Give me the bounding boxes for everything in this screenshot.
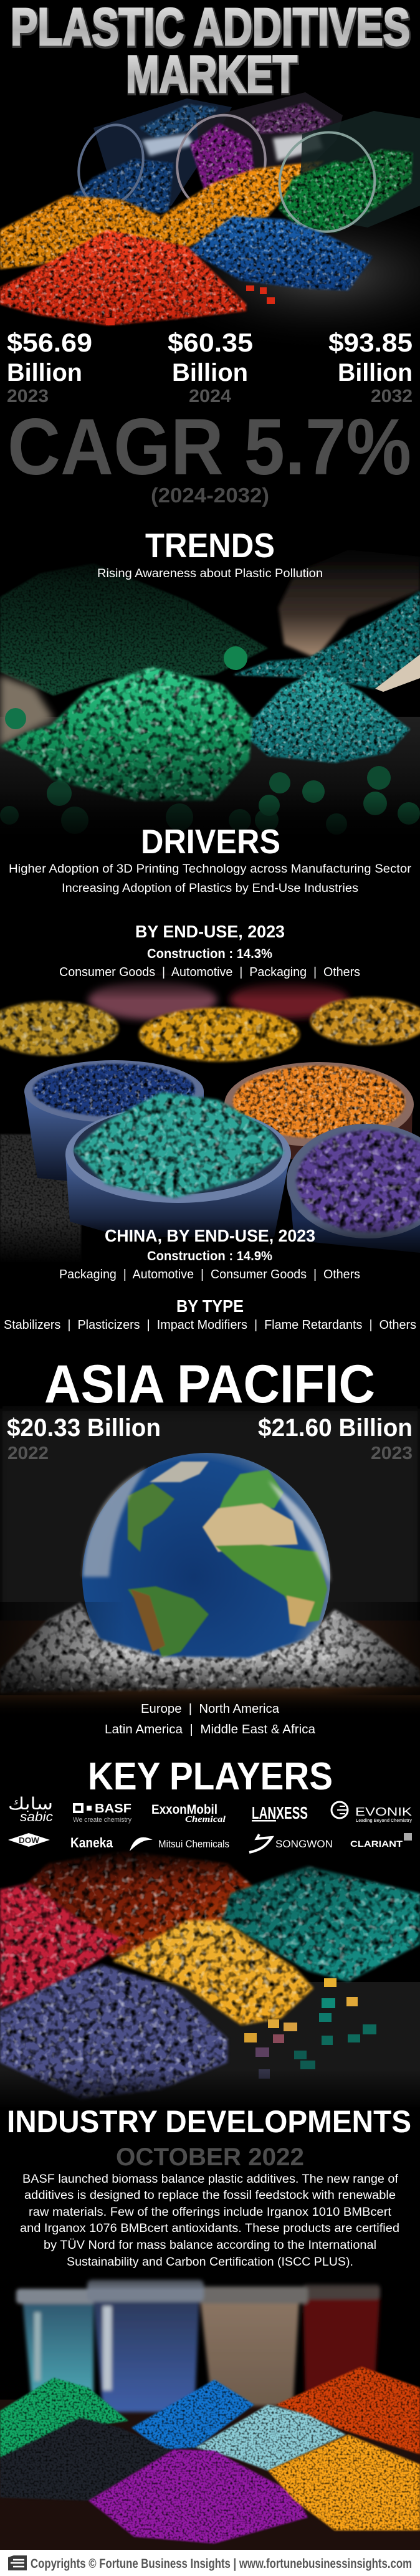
development date: OCTOBER 2022 (116, 2143, 304, 2171)
segment: by end-use 2023: Construction : 14.3% (147, 947, 272, 961)
segment: china by end-use 2023: Packaging | Automotive | Consumer Goods | Others (59, 1268, 360, 1281)
regional value: 2023: $21.60 Billion (258, 1414, 413, 1442)
segment: by type: Stabilizers | Plasticizers | Impact Modifiers | Flame Retardants | Others (4, 1318, 416, 1332)
pile: light blue (196, 2405, 346, 2471)
logo: songwon: SONGWON (275, 1838, 333, 1850)
stat: 2023 market size: $56.69 (7, 328, 92, 357)
stat: 2023 market size: 2023 (7, 386, 49, 406)
logo: clariant: CLARIANT (350, 1839, 403, 1849)
logos: key players (8, 1794, 412, 1852)
title (11, 0, 410, 103)
logo: sabic: sabic (20, 1810, 54, 1824)
regional value: 2023 (258, 1414, 413, 1463)
logo: mitsui chemicals: Mitsui Chemicals (158, 1838, 229, 1850)
jar: green (267, 111, 420, 244)
pile: red-orange (276, 2367, 420, 2454)
development description: additives is designed to replace the fossil feedstock with renewable (24, 2189, 396, 2202)
pile: orange (0, 161, 324, 269)
scattered pellets (244, 1978, 376, 2079)
other regions (105, 1702, 316, 1736)
segment: china by end-use 2023 (59, 1226, 360, 1281)
development description: raw materials. Few of the offerings include Irganox 1010 BMBcert (29, 2206, 392, 2219)
stat: 2024 market size: $60.35 (168, 328, 253, 357)
segment: china by end-use 2023: CHINA, BY END-USE, 2023 (105, 1226, 315, 1245)
heading: drivers: DRIVERS (141, 822, 280, 861)
trends image: green and teal pellets (0, 527, 420, 848)
bowls image (0, 975, 420, 1263)
heading: trends: TRENDS (145, 526, 275, 565)
jar: blue (65, 98, 232, 215)
development description: BASF launched biomass balance plastic additives. The new range of (22, 2173, 399, 2186)
globe (81, 1453, 333, 1660)
bowl: teal (65, 1092, 291, 1237)
development description: by TÜV Nord for mass balance according to the International (44, 2239, 376, 2252)
heading: industry developments: INDUSTRY DEVELOPMENTS (7, 2104, 411, 2139)
footer (0, 2550, 420, 2576)
regional value: 2022: 2022 (7, 1444, 49, 1463)
CAGR figure: (2024-2032) (151, 484, 269, 507)
hero image: jars and spilled pellets (0, 92, 420, 352)
regional value: 2022: $20.33 Billion (7, 1414, 161, 1442)
bowl: orange (224, 1062, 414, 1159)
logo: kaneka: Kaneka (70, 1835, 113, 1851)
green beads (0, 646, 420, 835)
stat: 2032 market size: $93.85 (328, 328, 413, 357)
logo: songwon (249, 1834, 333, 1852)
stat: 2032 market size: Billion (338, 359, 413, 386)
jar: purple (165, 92, 343, 223)
pile: black (0, 2418, 171, 2501)
logo: dow (8, 1833, 50, 1847)
pile: blue (131, 2380, 254, 2449)
heading: asia pacific: ASIA PACIFIC (44, 1354, 375, 1414)
logo: lanxess: LANXESS (252, 1803, 308, 1822)
bowl: purple and blue (287, 1124, 420, 1253)
stat: 2032 market size: 2032 (371, 386, 413, 406)
logo: basf: BASF (95, 1802, 131, 1816)
title: MARKET (126, 45, 297, 103)
segment: by type: BY TYPE (176, 1296, 244, 1316)
pile: red (0, 230, 246, 325)
segment: by end-use 2023: BY END-USE, 2023 (135, 922, 285, 941)
heading: trends: Rising Awareness about Plastic Pollution (97, 567, 323, 580)
stat: 2023 market size (7, 328, 92, 406)
logo: lanxess (252, 1803, 308, 1822)
segment: by type (4, 1296, 416, 1332)
segment: china by end-use 2023: Construction : 14.9% (147, 1249, 272, 1263)
pile: purple (88, 2449, 308, 2544)
logo: basf: We create chemistry (73, 1816, 131, 1824)
heading: drivers: Higher Adoption of 3D Printing Technology across Manufacturing Sector (9, 863, 412, 876)
heading: key players: KEY PLAYERS (88, 1755, 333, 1798)
globe image on plastic pile (0, 1407, 420, 1705)
regional value: 2023: 2023 (371, 1444, 413, 1463)
segment: by end-use 2023 (59, 922, 360, 979)
blurred back bowls (0, 979, 420, 1061)
logo: dow: DOW (19, 1836, 40, 1845)
logo: basf (73, 1802, 131, 1824)
plastic chips pile (0, 1603, 420, 1692)
development description: and Irganox 1076 BMBcert antioxidants. These products are certified (20, 2222, 399, 2235)
logo: exxonmobil chemical: Chemical (185, 1815, 226, 1824)
stat: 2023 market size: Billion (7, 359, 82, 386)
regional value: 2022 (7, 1414, 161, 1463)
other regions: Latin America | Middle East & Africa (105, 1723, 316, 1736)
segment: by end-use 2023: Consumer Goods | Automotive | Packaging | Others (59, 965, 360, 979)
stat: 2024 market size: Billion (172, 359, 248, 386)
logo: evonik: EVONIK (355, 1806, 412, 1818)
stat: 2024 market size: 2024 (189, 386, 231, 406)
scattered pellets (106, 285, 275, 325)
logo: clariant (350, 1833, 412, 1849)
cups (16, 2279, 380, 2412)
continents (128, 1462, 327, 1658)
cups and pellet piles image (0, 2269, 420, 2550)
stat: 2032 market size (328, 328, 413, 406)
logo: exxonmobil chemical: ExxonMobil (151, 1803, 217, 1817)
logo: evonik (332, 1802, 412, 1823)
logo: exxonmobil chemical (151, 1803, 226, 1824)
heading: trends (97, 526, 323, 580)
pile: orange (268, 2435, 420, 2531)
logo: mitsui chemicals (130, 1837, 229, 1851)
logo: evonik: Leading Beyond Chemistry (356, 1819, 412, 1823)
pile: blue (188, 216, 373, 290)
heading: drivers: Increasing Adoption of Plastics by End-Use Industries (62, 882, 358, 895)
icon: fortune business insights (8, 2555, 27, 2570)
other regions: Europe | North America (141, 1702, 280, 1716)
pile: green (0, 2378, 128, 2459)
bowl: blue (24, 1060, 204, 1184)
development description: Sustainability and Carbon Certification (ISCC PLUS). (67, 2256, 353, 2269)
heading: drivers (9, 822, 412, 895)
ground speckle (0, 1134, 81, 1262)
logo: sabic (8, 1794, 54, 1824)
logo: sabic: سابك (8, 1794, 53, 1814)
multicolour pellet piles image (0, 1845, 420, 2110)
stat: 2024 market size (168, 328, 253, 406)
development description (20, 2173, 399, 2269)
